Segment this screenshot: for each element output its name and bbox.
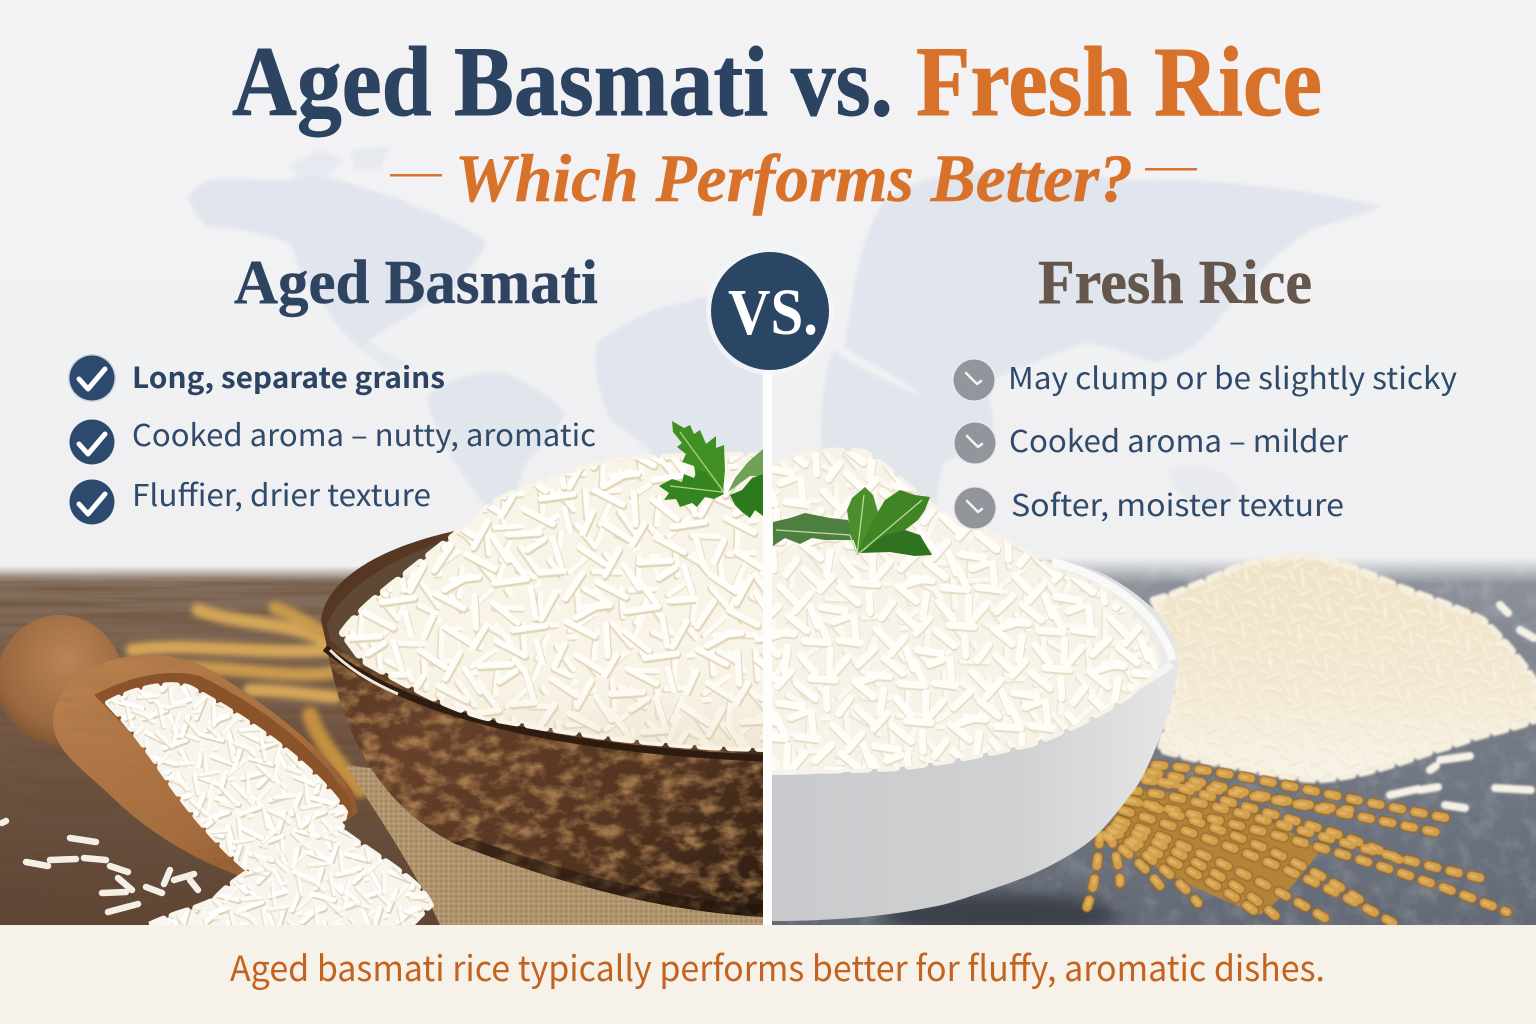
fresh rice mound xyxy=(772,451,1158,770)
check icon 2 xyxy=(70,420,114,464)
title part: Fresh Rice: Fresh Rice xyxy=(916,26,1322,137)
subtitle right dash xyxy=(1145,168,1197,170)
loose grains, right xyxy=(1390,605,1534,808)
stalk shadow mass xyxy=(1110,790,1320,915)
item 1 text: Long, separate grains xyxy=(132,355,445,397)
item 3 text: Softer, moister texture xyxy=(1011,481,1344,525)
left wheat stalks xyxy=(132,608,360,790)
photo: wooden table xyxy=(0,566,440,925)
item 3 text: Fluffier, drier texture xyxy=(132,471,431,515)
scoop grain xyxy=(58,680,352,874)
column heading: Fresh Rice: Fresh Rice xyxy=(1038,249,1312,317)
photo: slate table xyxy=(772,558,1536,937)
list: aged basmati benefits xyxy=(68,354,596,524)
list: fresh rice traits xyxy=(952,354,1457,530)
wooden scoop xyxy=(0,615,370,890)
left bowl xyxy=(320,421,763,920)
bowl back rim xyxy=(1052,562,1173,660)
minus-check icon 2 xyxy=(953,421,997,465)
right bowl xyxy=(772,451,1178,921)
bowl rim lip xyxy=(325,648,763,758)
stalk grain outlines xyxy=(1087,765,1507,923)
item 1 text: May clump or be slightly sticky xyxy=(1008,354,1457,398)
centre divider xyxy=(763,365,772,925)
VS badge xyxy=(706,247,834,375)
minus-check icon 3 xyxy=(953,486,997,530)
basmati rice mound xyxy=(343,456,763,748)
cilantro garnish, right xyxy=(773,487,932,556)
burlap mat xyxy=(345,765,763,925)
bowl body xyxy=(321,500,763,917)
title part: Aged Basmati vs.: Aged Basmati vs. xyxy=(232,26,893,137)
bowl front lip xyxy=(772,664,1172,771)
scoop inner rim xyxy=(94,673,352,878)
subtitle text: Which Performs Better? xyxy=(455,140,1133,216)
minus-check icon 1 xyxy=(952,358,996,402)
bowl inner wall xyxy=(327,540,754,750)
spilled rice, left xyxy=(2,821,430,925)
title xyxy=(232,26,1322,137)
world map watermark xyxy=(188,146,1380,555)
item 2 text: Cooked aroma – nutty, aromatic xyxy=(132,411,596,455)
scoop rice xyxy=(108,685,345,880)
bowl rust texture xyxy=(320,650,763,920)
cilantro garnish, left xyxy=(659,421,763,518)
item 2 text: Cooked aroma – milder xyxy=(1009,417,1348,461)
subtitle left dash xyxy=(390,174,442,176)
rice pile, right xyxy=(1153,557,1536,808)
check icon 3 xyxy=(70,480,114,524)
bowl interior xyxy=(900,566,1170,750)
VS label: VS. xyxy=(728,276,818,349)
footer conclusion text: Aged basmati rice typically performs better for fluffy, aromatic dishes. xyxy=(230,941,1325,992)
scoop body xyxy=(53,655,358,882)
stalk grains xyxy=(1087,765,1507,923)
check icon 1 xyxy=(68,354,116,402)
rice stalks, right xyxy=(1087,765,1507,923)
bowl base shadow xyxy=(453,838,763,917)
stalk highlight grains xyxy=(1087,765,1507,923)
scoop handle ball xyxy=(0,615,123,745)
column heading: Aged Basmati: Aged Basmati xyxy=(234,249,598,317)
bowl rim highlight xyxy=(330,650,398,694)
footer band xyxy=(0,925,1536,1024)
bowl body xyxy=(772,560,1178,921)
